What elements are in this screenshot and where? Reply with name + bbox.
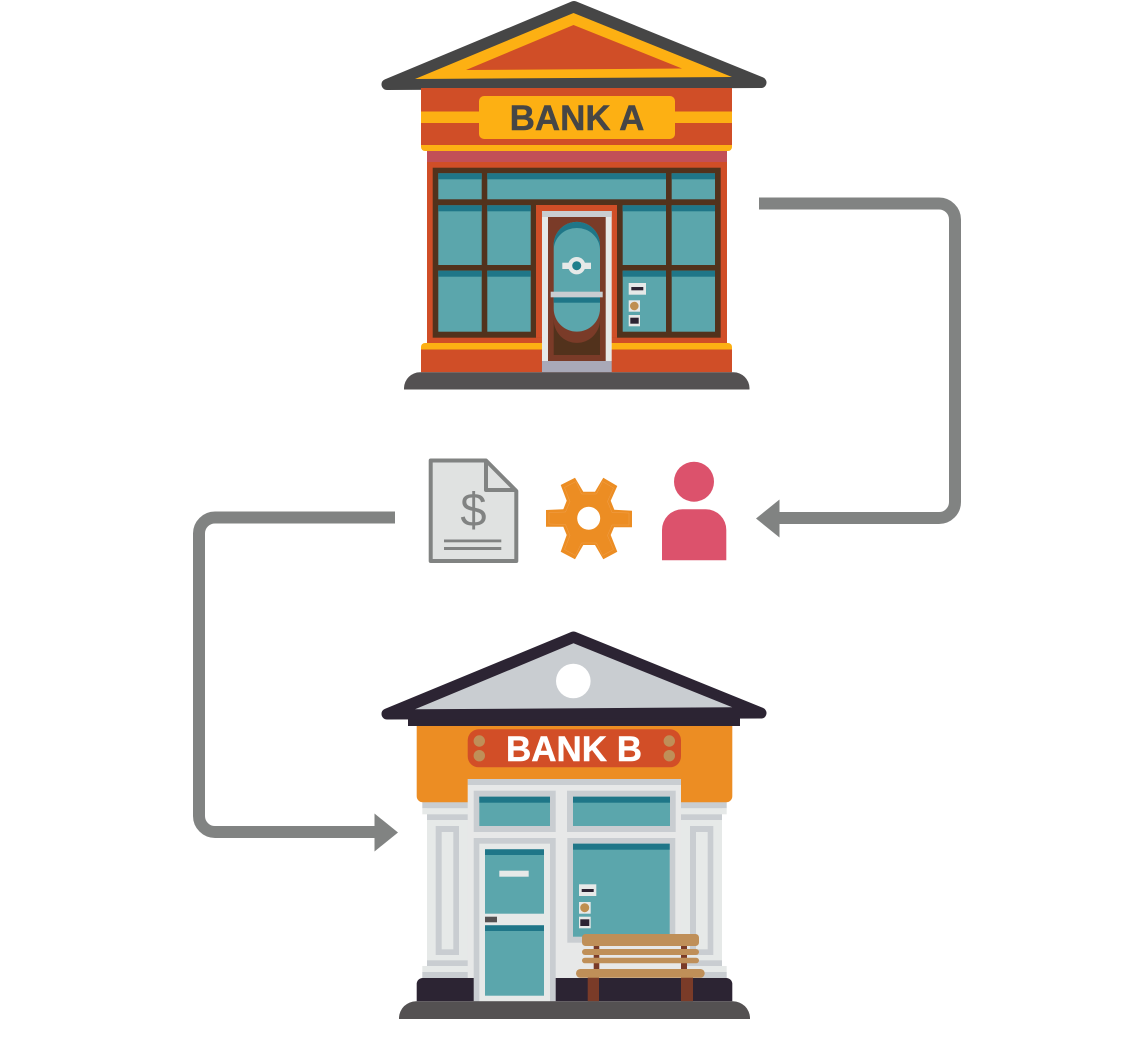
Bank A fascia with sign xyxy=(421,88,732,151)
Bank A roof xyxy=(387,6,761,84)
icon: dollar document: $ xyxy=(460,483,487,536)
Bank B upper windows xyxy=(474,791,676,832)
Bank A door xyxy=(536,205,617,372)
icon: Bank B building xyxy=(387,637,761,1019)
Bank A window stickers xyxy=(629,283,646,326)
Bank B ground xyxy=(399,1001,750,1019)
Bank B dark plinth xyxy=(417,978,732,1001)
Bank B fascia with sign xyxy=(417,726,732,802)
Bank B facade xyxy=(422,779,727,978)
icon: dollar document xyxy=(431,460,516,561)
icon: Bank A building xyxy=(387,6,761,390)
Bank A windows xyxy=(433,168,721,338)
Bank B door xyxy=(474,838,556,1001)
Bank B large window xyxy=(567,838,675,943)
icon: gear xyxy=(546,478,632,559)
Bank A ground xyxy=(404,372,750,390)
Bank A fascia with sign: BANK A xyxy=(510,99,644,138)
Bank B fascia with sign: BANK B xyxy=(506,730,642,769)
arrow: process icons to Bank B xyxy=(199,518,398,852)
Bank A base step xyxy=(421,343,732,372)
arrow: Bank A to process icons xyxy=(756,204,955,538)
icon: person xyxy=(662,462,726,560)
bench xyxy=(576,934,705,1001)
Bank B roof xyxy=(387,637,761,726)
Bank A wall xyxy=(427,151,727,344)
